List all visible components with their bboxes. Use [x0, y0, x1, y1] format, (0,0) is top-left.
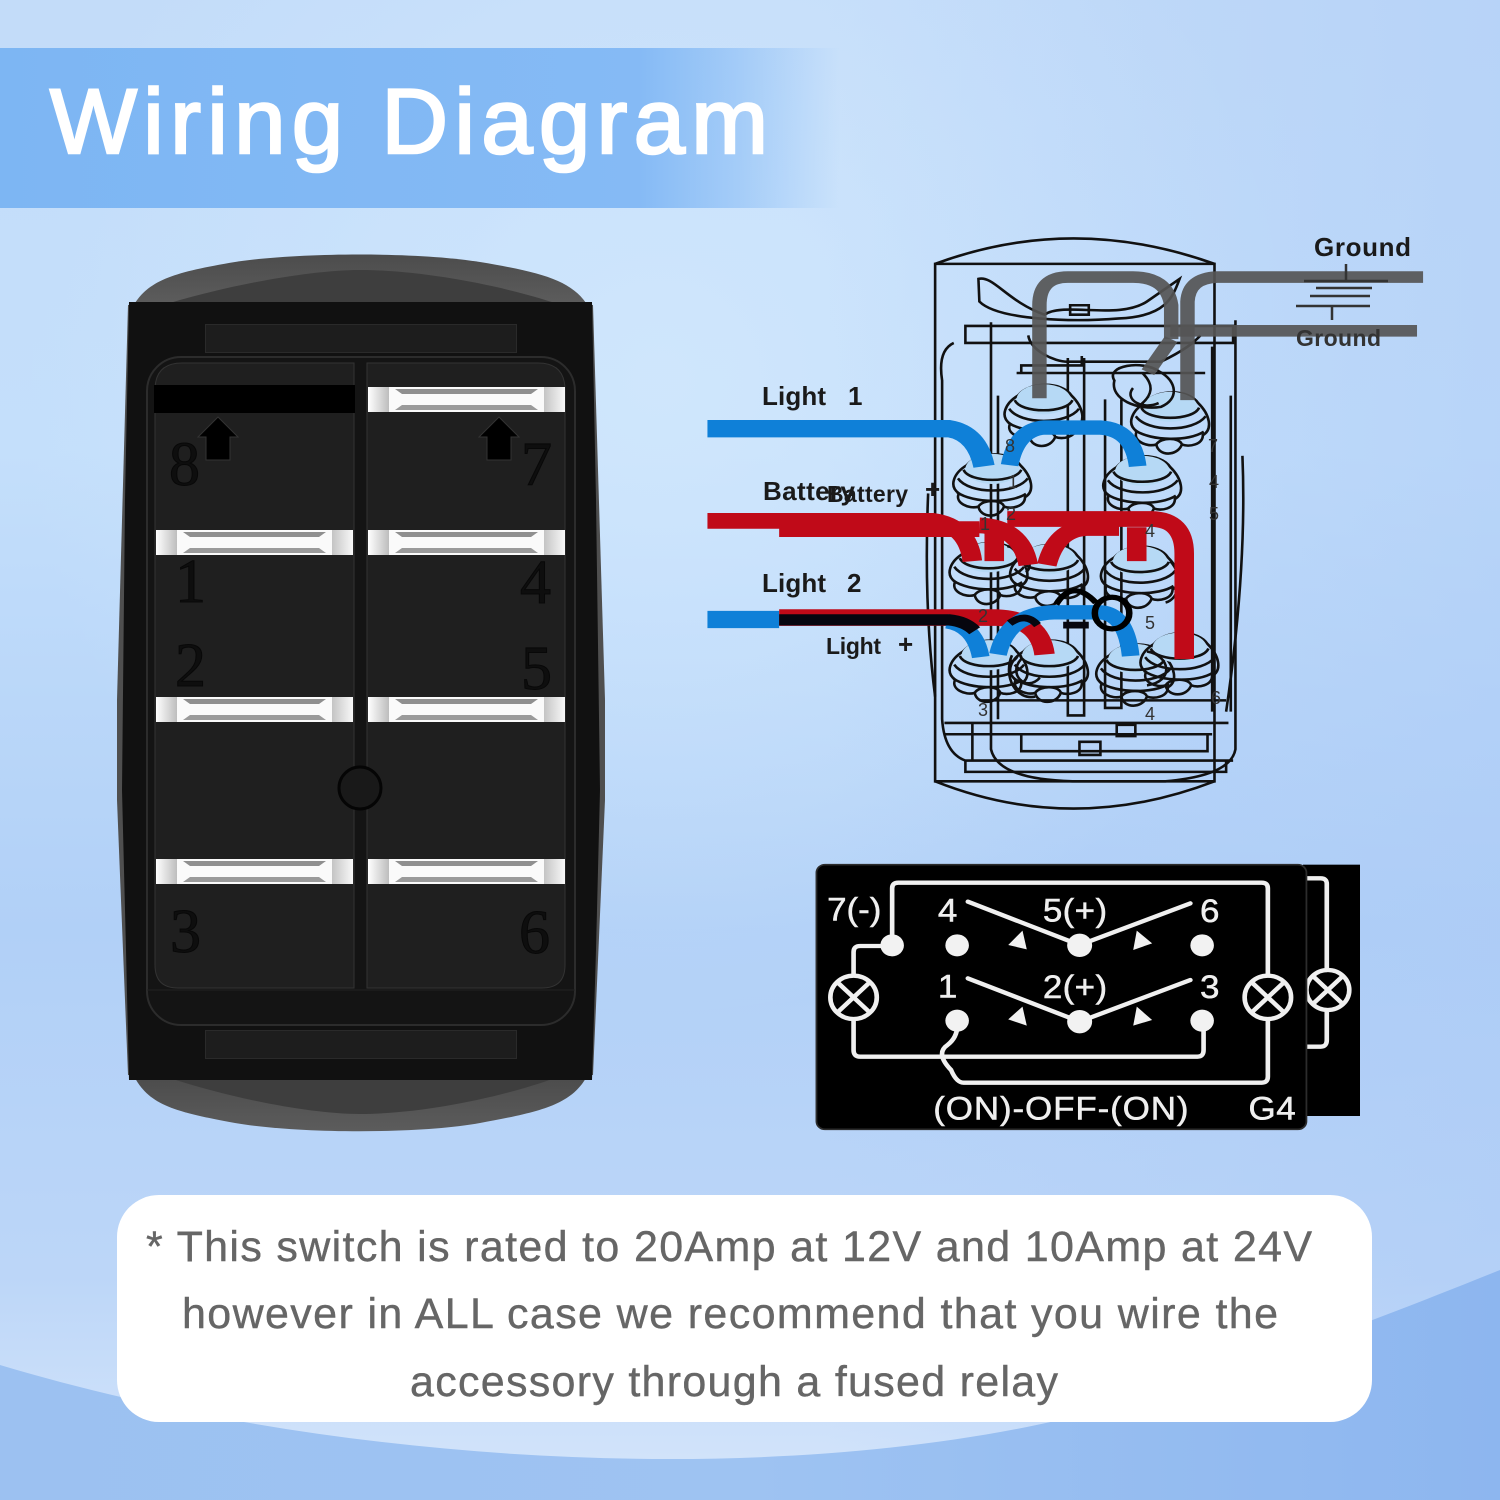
terminal numbers: 2	[175, 632, 206, 700]
note text: however in ALL case we recommend that you wire the	[182, 1290, 1278, 1338]
labels: 5	[1145, 613, 1155, 633]
labels: 3	[978, 700, 988, 720]
link wire 8 to 7	[1010, 428, 1138, 466]
circuit schematic	[816, 865, 1360, 1129]
top cap	[135, 254, 586, 303]
terminal numbers: 5	[521, 635, 552, 703]
lines	[892, 883, 1268, 975]
body	[122, 302, 600, 1080]
labels: +	[898, 629, 913, 659]
bottom slot	[206, 1030, 516, 1058]
labels: +	[925, 474, 940, 504]
schematic labels: 5(+)	[1043, 892, 1107, 929]
left cavity column	[155, 363, 354, 988]
schematic labels: 3	[1200, 969, 1219, 1006]
terminal numbers: 7	[521, 431, 552, 499]
schematic labels: 7(-)	[827, 892, 881, 928]
labels	[762, 232, 1411, 724]
labels: Battery	[763, 476, 856, 506]
ground symbol	[1296, 264, 1388, 320]
top slot	[206, 324, 516, 352]
right cavity column	[367, 363, 565, 988]
labels: 4	[1209, 472, 1219, 492]
labels: 5	[1209, 504, 1219, 524]
labels: 7	[1208, 436, 1218, 456]
lamp right	[1245, 976, 1291, 1019]
schematic labels: G4	[1249, 1090, 1296, 1127]
schematic labels: 1	[938, 968, 957, 1005]
terminal numbers: 3	[170, 898, 201, 966]
ground wires	[1039, 277, 1423, 400]
terminal numbers	[169, 431, 552, 967]
labels: Light	[762, 381, 826, 411]
bottom cap	[135, 1078, 586, 1131]
labels: 1	[1008, 472, 1018, 492]
arrow left	[198, 417, 238, 460]
terminal numbers: 1	[175, 548, 206, 616]
inner frame	[147, 357, 575, 1025]
contacts	[880, 931, 1214, 1033]
terminals	[950, 365, 1218, 706]
schematic labels: 6	[1200, 893, 1219, 930]
labels: Light	[826, 633, 881, 659]
switch blades	[968, 902, 1190, 1022]
schematic labels: 2(+)	[1043, 969, 1107, 1006]
schematic labels: 4	[938, 892, 957, 929]
labels: Battery	[827, 481, 908, 507]
terminal bars	[156, 387, 565, 884]
labels: 1	[980, 514, 990, 534]
arrow right	[479, 417, 519, 460]
housing outline	[927, 238, 1243, 809]
title banner	[0, 48, 840, 208]
labels: 8	[1005, 436, 1015, 456]
labels: 2	[978, 606, 988, 626]
terminal numbers: 4	[520, 549, 551, 617]
labels: Ground	[1296, 325, 1381, 351]
light 1 wire	[707, 429, 984, 466]
note card	[117, 1195, 1372, 1422]
note text	[146, 1223, 1312, 1406]
schematic labels	[827, 892, 1296, 1127]
light 2 wire	[707, 612, 1131, 657]
side flanges	[117, 305, 605, 1075]
labels: 2	[847, 568, 861, 598]
labels: 2	[1006, 504, 1016, 524]
black missing terminal strip	[154, 385, 355, 413]
note text: * This switch is rated to 20Amp at 12V and 10Amp at 24V	[146, 1223, 1312, 1271]
lamp left	[830, 976, 877, 1019]
labels: 1	[848, 381, 862, 411]
labels: Light	[762, 568, 826, 598]
schematic labels: (ON)-OFF-(ON)	[933, 1090, 1189, 1127]
labels: 4	[1145, 521, 1155, 541]
black loop	[1056, 591, 1129, 629]
labels: 4	[1145, 704, 1155, 724]
battery wires	[707, 519, 1184, 659]
centre post	[339, 767, 381, 809]
title: Wiring Diagram	[50, 71, 768, 173]
switch back view	[117, 254, 605, 1131]
labels: Ground	[1314, 232, 1411, 262]
note text: accessory through a fused relay	[410, 1358, 1058, 1406]
side panel	[1303, 865, 1360, 1116]
labels: 6	[1211, 688, 1221, 708]
terminal numbers: 8	[169, 431, 200, 499]
wiring drawing	[707, 232, 1423, 809]
terminal numbers: 6	[519, 899, 550, 967]
main panel	[816, 865, 1306, 1129]
